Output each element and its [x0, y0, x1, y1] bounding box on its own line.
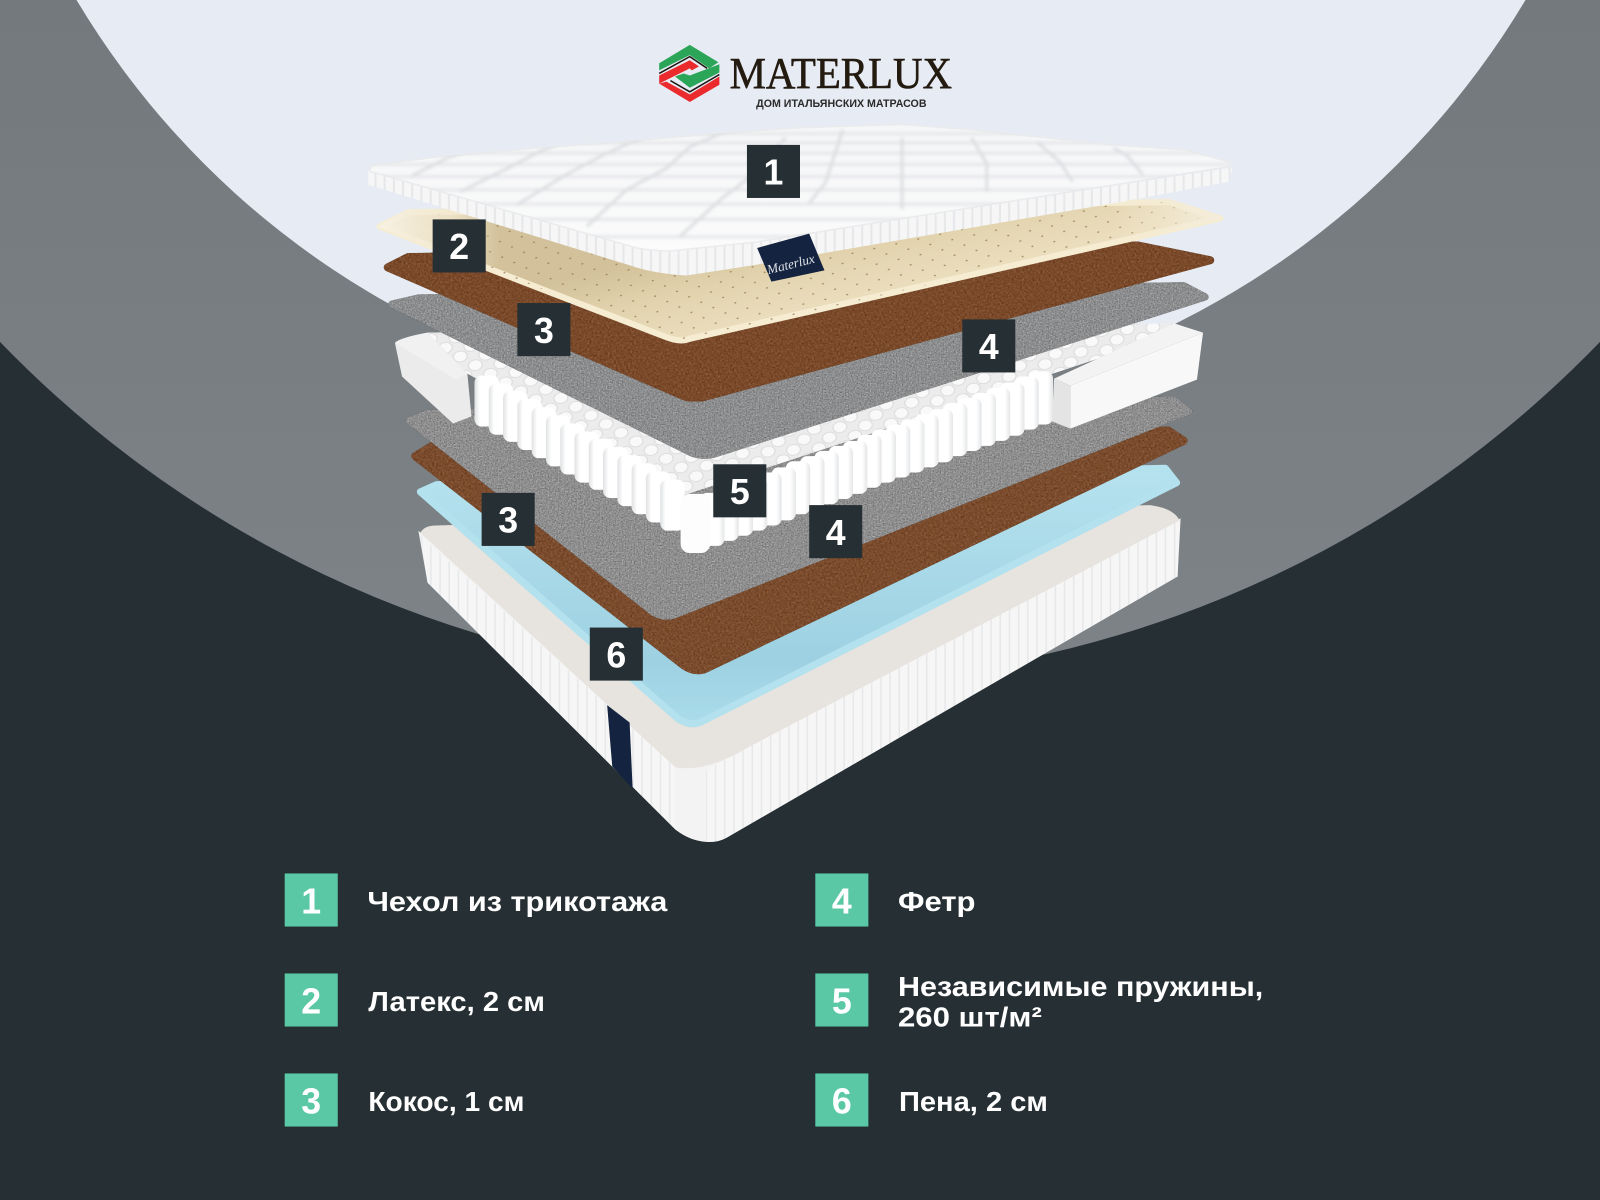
marker 3 upper [517, 303, 570, 356]
legend item 3: 3 [301, 1081, 321, 1121]
cover border [368, 167, 1233, 276]
marker 4 lower [809, 505, 862, 558]
legend item 5: 260 шт/м² [898, 1002, 1042, 1033]
legend item 2: Латекс, 2 см [368, 986, 545, 1017]
legend item 2 [285, 973, 545, 1027]
marker 6 [590, 628, 643, 681]
legend item 4: Фетр [898, 886, 976, 917]
legend item 2: 2 [301, 981, 321, 1021]
label: base tag [607, 705, 633, 789]
legend item 1 [285, 873, 668, 927]
springs left face [474, 376, 685, 531]
marker 6: 6 [606, 635, 626, 675]
marker 2: 2 [449, 227, 469, 267]
marker 4 upper [962, 319, 1015, 372]
spring top surface [428, 323, 1189, 495]
legend item 6: Пена, 2 см [899, 1086, 1048, 1117]
layer: coconut upper [388, 245, 1210, 398]
legend item 5: Независимые пружины, [898, 971, 1263, 1002]
label: cover tag [757, 234, 824, 282]
layer: spring block [395, 323, 1203, 553]
legend item 3 [285, 1073, 524, 1127]
icon: logo hexagon [659, 45, 719, 102]
marker 4 upper: 4 [979, 327, 999, 367]
marker 3 lower: 3 [498, 501, 518, 541]
foam block left [395, 333, 471, 423]
cover top surface [357, 124, 1245, 251]
legend item 6 [815, 1073, 1048, 1127]
layer: felt lower [409, 400, 1189, 616]
layer: coconut lower [415, 431, 1184, 670]
marker 2 [433, 219, 486, 272]
legend item 3: Кокос, 1 см [368, 1086, 524, 1117]
legend item 4: 4 [832, 881, 852, 921]
marker 3 lower [482, 493, 535, 546]
marker 1 [747, 145, 800, 198]
mattress exploded view [357, 124, 1245, 842]
label: cover tag: Materlux [764, 251, 816, 277]
spring front column [681, 494, 710, 553]
layer: knitted cover [357, 124, 1245, 282]
number markers on layers [433, 145, 1015, 681]
legend item 1: 1 [301, 881, 321, 921]
layer: felt upper [392, 286, 1205, 455]
marker 3 upper: 3 [534, 311, 554, 351]
layer: foam [420, 468, 1177, 724]
marker 5 [713, 464, 766, 517]
legend [285, 873, 1263, 1127]
foam block right [1052, 323, 1203, 429]
logo tagline: ДОМ ИТАЛЬЯНСКИХ МАТРАСОВ [756, 98, 927, 110]
legend item 5: 5 [832, 981, 852, 1021]
legend item 6: 6 [832, 1081, 852, 1121]
legend item 1: Чехол из трикотажа [367, 886, 668, 917]
legend item 4 [815, 873, 976, 927]
layer: mattress base [418, 505, 1181, 842]
springs right face [700, 371, 1053, 546]
logo [659, 45, 952, 110]
marker 1: 1 [764, 153, 783, 193]
marker 5: 5 [730, 472, 750, 512]
legend item 5 [815, 971, 1263, 1033]
logo wordmark: MATERLUX [730, 48, 952, 98]
marker 4 lower: 4 [826, 513, 846, 553]
layer: latex [377, 199, 1223, 340]
